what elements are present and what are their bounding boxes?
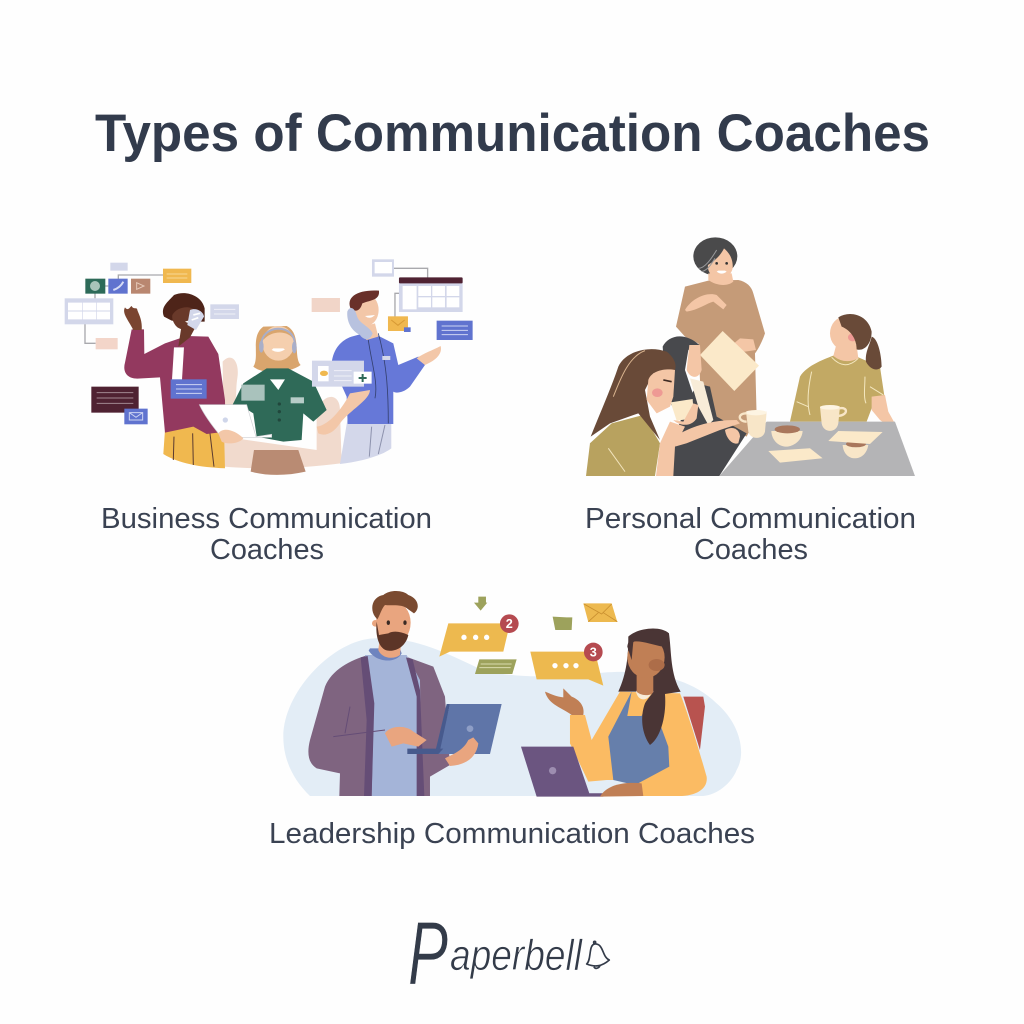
logo: Paperbell — [408, 904, 609, 1004]
table — [719, 405, 915, 476]
floating cards right — [312, 259, 473, 340]
label: personal communication coaches — [585, 503, 916, 566]
background blobs — [223, 358, 342, 468]
logo: Paperbell: aperbell — [450, 931, 583, 980]
illustration: business communication coaches — [65, 259, 473, 475]
person: woman in maroon jacket — [124, 293, 226, 468]
title: Types of Communication Coaches — [95, 104, 930, 163]
illustration: personal communication coaches — [586, 237, 915, 476]
logo: Paperbell: P — [408, 904, 448, 1004]
floating cards left — [65, 263, 239, 424]
person: man in blue shirt — [332, 291, 441, 464]
label: business communication coaches: Coaches — [210, 534, 324, 566]
woman with laptop — [521, 629, 707, 797]
man with laptop — [308, 591, 502, 796]
label: leadership communication coaches: Leadership Communication Coaches — [269, 818, 755, 850]
left woman drinking from cup — [586, 349, 698, 476]
seated woman with dark hair — [663, 336, 747, 476]
label: personal communication coaches: Personal Communication — [585, 503, 916, 535]
label: personal communication coaches: Coaches — [694, 534, 808, 566]
chat icons — [439, 597, 617, 686]
person: woman in green with headset — [199, 326, 370, 475]
connector lines — [85, 268, 428, 343]
illustration: leadership communication coaches — [283, 591, 741, 797]
chat icons: 2 — [506, 617, 513, 631]
chat icons: 3 — [590, 645, 597, 659]
product card — [312, 361, 372, 387]
cups and bowls — [740, 405, 883, 463]
standing woman — [676, 237, 765, 437]
label: business communication coaches — [101, 503, 432, 566]
right woman with ponytail — [790, 314, 897, 430]
label: business communication coaches: Business Communication — [101, 503, 432, 535]
icon: bell — [587, 941, 609, 968]
blue background blob — [283, 638, 741, 796]
